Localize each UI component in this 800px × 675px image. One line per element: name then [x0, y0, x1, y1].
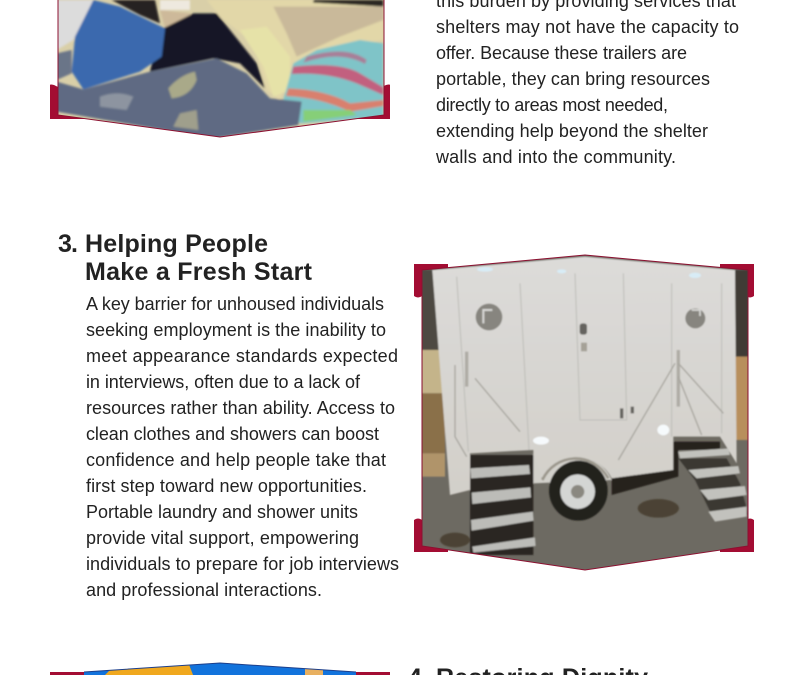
heading: section 3: 3. [58, 230, 78, 258]
paragraph: section 3 body: Portable laundry and shower units [86, 502, 358, 522]
photo: person resting under blankets [50, 0, 390, 140]
photo: section 4 image, cropped at page edge [50, 662, 390, 675]
heading: section 3: Helping People [85, 230, 268, 258]
paragraph: section 3 body: in interviews, often due to a lack of [86, 372, 361, 392]
paragraph: section 2 continuation: extending help beyond the shelter [436, 121, 708, 141]
paragraph: section 3 body: individuals to prepare for job interviews [86, 554, 399, 574]
paragraph: section 3 body: confidence and help people take that [86, 450, 386, 470]
paragraph: section 2 continuation: offer. Because these trailers are [436, 43, 687, 63]
paragraph: section 2 continuation: walls and into the community. [435, 147, 676, 167]
heading: section 3 [58, 230, 313, 286]
heading: section 3: Make a Fresh Start [85, 258, 313, 286]
paragraph: section 3 body: meet appearance standards expected [86, 346, 398, 366]
paragraph: section 3 body: A key barrier for unhoused individuals [86, 294, 384, 314]
paragraph: section 3 body: seeking employment is the inability to [86, 320, 386, 340]
photo: portable shower trailer [414, 250, 754, 580]
paragraph: section 3 body: first step toward new opportunities. [86, 476, 367, 496]
paragraph: section 3 body [86, 294, 399, 600]
paragraph: section 2 continuation [435, 0, 739, 167]
paragraph: section 2 continuation: directly to areas most needed, [436, 95, 668, 115]
paragraph: section 3 body: resources rather than ability. Access to [86, 398, 395, 418]
paragraph: section 3 body: clean clothes and showers can boost [86, 424, 379, 444]
paragraph: section 3 body: provide vital support, empowering [86, 528, 359, 548]
paragraph: section 2 continuation: shelters may not have the capacity to [436, 17, 739, 37]
corner brackets: photo 4 [50, 672, 390, 675]
corner brackets: photo 3 [414, 264, 754, 552]
corner brackets: photo 1 [50, 84, 390, 119]
paragraph: section 3 body: and professional interactions. [86, 580, 322, 600]
paragraph: section 2 continuation: portable, they can bring resources [436, 69, 710, 89]
